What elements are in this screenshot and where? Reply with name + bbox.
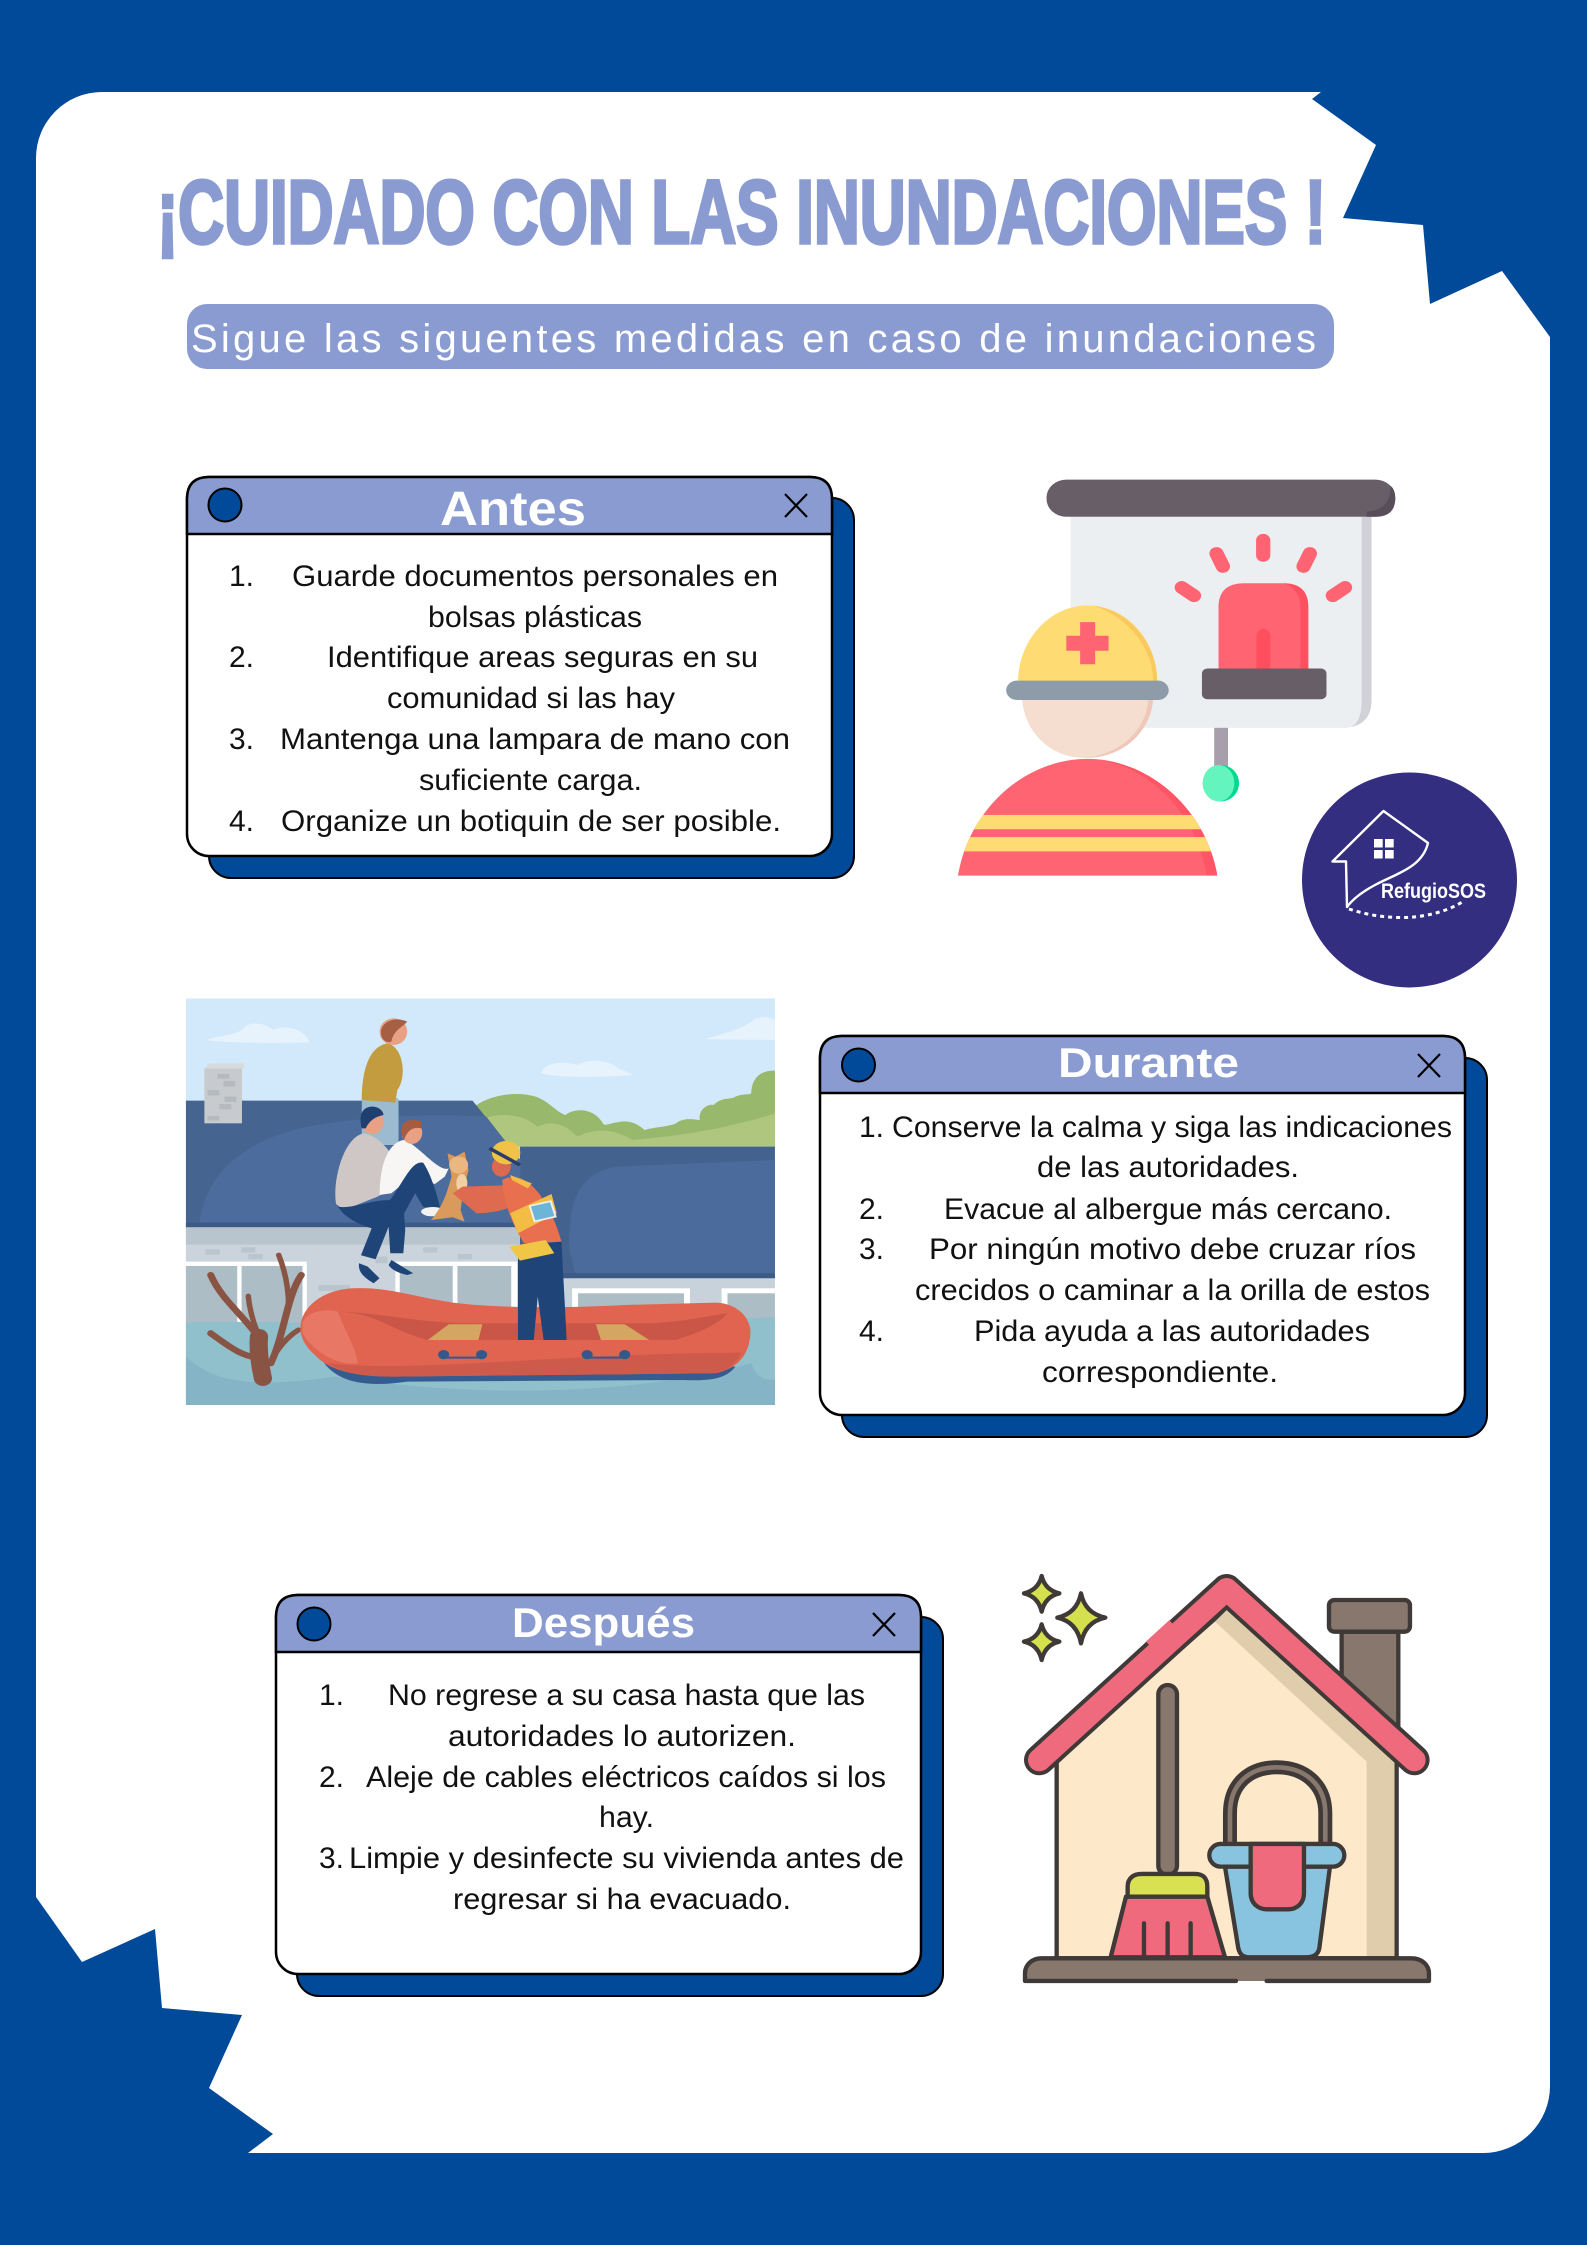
window dot	[208, 488, 242, 522]
panel body	[187, 477, 832, 856]
panel shadow	[842, 1058, 1487, 1437]
windows	[186, 1262, 775, 1329]
helmet	[1006, 605, 1169, 700]
subtitle pill	[187, 304, 1334, 369]
list: Después: 3.	[319, 1842, 344, 1875]
heading: Durante: Durante	[1058, 1039, 1239, 1086]
list: Después: autoridades lo autorizen.	[448, 1720, 796, 1753]
subtitle pill: Sigue las siguentes medidas en caso de inundaciones	[191, 317, 1316, 361]
panel shadow	[209, 498, 854, 878]
panel body	[276, 1595, 921, 1974]
list: Antes: 2.	[229, 641, 254, 674]
worker head	[1022, 696, 1153, 758]
list: Después: 1.	[319, 1679, 344, 1712]
board	[1071, 517, 1372, 728]
list: Después: Limpie y desinfecte su vivienda antes de	[349, 1842, 904, 1875]
broom	[1111, 1685, 1225, 1957]
worker body	[952, 759, 1228, 876]
panel: Antes	[187, 477, 854, 878]
floor	[1025, 1958, 1429, 1981]
list: Después: regresar si ha evacuado.	[453, 1883, 791, 1916]
house wall	[1057, 1608, 1397, 1958]
window dot	[298, 1608, 330, 1640]
water	[186, 1317, 775, 1405]
list: Durante: Por ningún motivo debe cruzar ríos	[929, 1233, 1416, 1266]
list: Durante	[859, 1111, 1452, 1389]
list: Después: No regrese a su casa hasta que las	[388, 1679, 865, 1712]
list: Antes: 4.	[229, 805, 254, 838]
close icon	[1418, 1054, 1440, 1077]
list: Durante: 4.	[859, 1315, 884, 1348]
list: Después: hay.	[599, 1801, 654, 1834]
icon: clean house	[1024, 1576, 1429, 1981]
list: Durante: 3.	[859, 1233, 884, 1266]
bushes	[471, 1071, 775, 1147]
list: Durante: Pida ayuda a las autoridades	[974, 1315, 1370, 1348]
tree branch	[211, 1255, 301, 1378]
icon: rescuer with alarm board	[952, 480, 1395, 876]
chimney	[1329, 1600, 1410, 1732]
list: Antes	[229, 560, 790, 838]
list: Durante: correspondiente.	[1042, 1356, 1278, 1389]
list: Antes: Organize un botiquin de ser posible.	[281, 805, 781, 838]
list: Después: Aleje de cables eléctricos caídos si los	[366, 1761, 886, 1794]
list: Antes: 1.	[229, 560, 254, 593]
cord knob	[1203, 765, 1239, 801]
sitting man	[335, 1107, 413, 1283]
pull cord	[1214, 728, 1228, 767]
panel shadow	[297, 1617, 943, 1996]
chimney	[204, 1063, 244, 1123]
close icon	[785, 494, 807, 517]
rescuer	[453, 1141, 567, 1340]
roof	[1039, 1589, 1414, 1760]
logo: RefugioSOS	[1302, 772, 1517, 988]
list: Antes: Mantenga una lampara de mano con	[280, 723, 790, 756]
dog	[431, 1152, 469, 1222]
list: Antes: comunidad si las hay	[387, 682, 675, 715]
sky	[186, 998, 775, 1159]
list: Durante: 1.	[859, 1111, 884, 1144]
panel header bar	[187, 477, 832, 534]
boat	[300, 1288, 750, 1384]
panel: Después	[276, 1595, 943, 1996]
sparkles	[1024, 1576, 1105, 1660]
list: Antes: bolsas plásticas	[428, 601, 642, 634]
list: Durante: crecidos o caminar a la orilla de estos	[915, 1274, 1430, 1307]
siren	[1182, 540, 1345, 699]
list: Antes: 3.	[229, 723, 254, 756]
list: Antes: suficiente carga.	[419, 764, 642, 797]
window dot	[842, 1048, 875, 1082]
heading: Después: Después	[512, 1599, 695, 1646]
list: Durante: Conserve la calma y siga las indicaciones	[892, 1111, 1452, 1144]
list: Antes: Guarde documentos personales en	[292, 560, 778, 593]
list: Durante: Evacue al albergue más cercano.	[944, 1193, 1392, 1226]
standing woman	[362, 1018, 407, 1145]
building wall	[186, 1227, 775, 1310]
roofs	[186, 1101, 775, 1278]
list: Durante: 2.	[859, 1193, 884, 1226]
heading: Antes: Antes	[440, 483, 586, 536]
bucket	[1209, 1767, 1344, 1957]
clouds	[206, 1017, 775, 1077]
list: Después	[319, 1679, 904, 1916]
panel: Durante	[820, 1036, 1487, 1437]
sitting boy	[380, 1120, 449, 1216]
list: Antes: Identifique areas seguras en su	[327, 641, 758, 674]
panel header bar	[820, 1036, 1465, 1093]
list: Durante: de las autoridades.	[1037, 1151, 1299, 1184]
board roller	[1047, 480, 1395, 517]
panel header bar	[276, 1595, 921, 1652]
panel body	[820, 1036, 1465, 1415]
logo: RefugioSOS: RefugioSOS	[1381, 880, 1486, 903]
list: Después: 2.	[319, 1761, 344, 1794]
illustration: flood rescue	[186, 998, 775, 1405]
close icon	[873, 1613, 895, 1636]
